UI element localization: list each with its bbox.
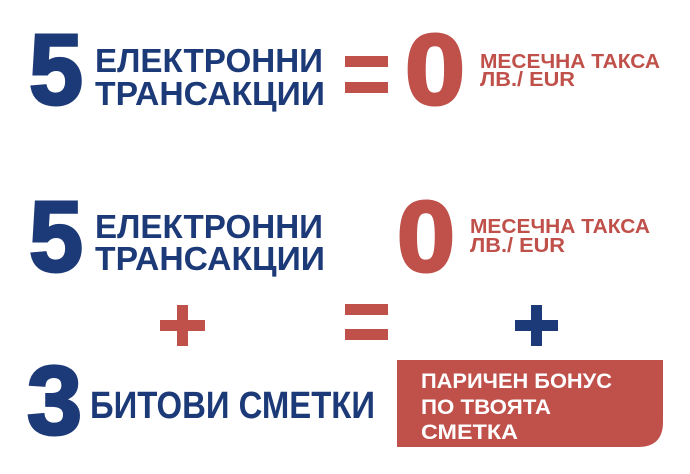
row 1: five transactions <box>29 14 325 126</box>
row 1: five transactions: ЕЛЕКТРОННИ <box>95 42 323 79</box>
row 2: five transactions <box>29 181 325 293</box>
zero fee 2: МЕСЕЧНА ТАКСА <box>470 216 650 238</box>
zero fee 2 <box>397 181 650 293</box>
equals sign 1 <box>345 56 388 93</box>
equals sign 2 <box>345 304 388 340</box>
three bill payments <box>27 346 375 455</box>
zero fee 1: ЛВ./ EUR <box>480 69 576 91</box>
zero fee 1: МЕСЕЧНА ТАКСА <box>480 51 660 73</box>
three bill payments: БИТОВИ СМЕТКИ <box>90 385 375 427</box>
zero fee 1 <box>405 14 660 126</box>
bonus box: ПАРИЧЕН БОНУС <box>421 370 612 393</box>
bonus box <box>397 360 663 447</box>
row 1: five transactions: ТРАНСАКЦИИ <box>95 75 325 112</box>
zero fee 2: ЛВ./ EUR <box>470 235 566 257</box>
bonus box: ПО ТВОЯТА <box>421 396 551 419</box>
row 2: five transactions: ТРАНСАКЦИИ <box>95 240 325 277</box>
row 2: five transactions: 5 <box>29 181 83 293</box>
blue plus <box>515 305 558 346</box>
three bill payments: 3 <box>27 346 82 455</box>
zero fee 2: 0 <box>397 181 455 293</box>
row 2: five transactions: ЕЛЕКТРОННИ <box>95 208 323 245</box>
red plus <box>160 305 205 346</box>
row 1: five transactions: 5 <box>29 14 83 126</box>
bonus box: СМЕТКА <box>421 421 518 444</box>
zero fee 1: 0 <box>405 14 465 126</box>
